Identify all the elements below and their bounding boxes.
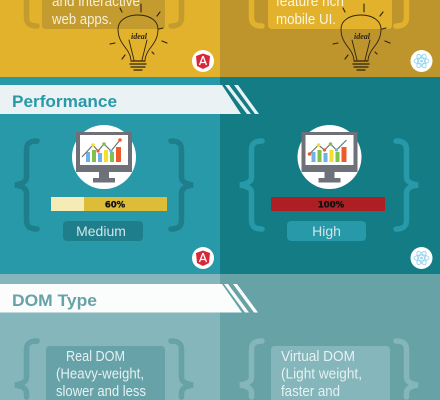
label: Medium: Medium	[76, 223, 126, 239]
label: Medium	[63, 221, 143, 241]
text block: Virtual DOM: Virtual DOM	[281, 348, 355, 365]
icon: React badge	[410, 247, 432, 269]
progress bar: 60%: 60%	[105, 200, 126, 210]
progress bar: 60%	[51, 197, 167, 211]
heading banner: Performance	[0, 85, 259, 114]
icon: monitor chart	[298, 125, 362, 189]
icon: React badge	[410, 50, 432, 72]
icon: monitor chart	[72, 125, 136, 189]
icon: light bulb: ideal	[354, 32, 371, 41]
brace: right	[171, 141, 193, 229]
brace: right	[396, 341, 418, 397]
text block: Real DOM: Real DOM	[66, 348, 125, 365]
progress bar: 100%	[271, 197, 385, 211]
brace: left	[252, 0, 262, 26]
icon: light bulb	[333, 4, 390, 70]
label: High: High	[312, 223, 341, 239]
heading banner: DOM Type	[0, 284, 258, 312]
text block: React use: mobile UI.	[276, 11, 336, 28]
icon: Angular badge	[192, 50, 214, 72]
icon: light bulb	[110, 4, 167, 70]
brace: left	[26, 0, 37, 26]
brace: right	[396, 0, 406, 26]
panel: ideal use, Angular	[0, 0, 220, 77]
text block: Virtual DOM: (Light weight,	[281, 366, 362, 382]
brace: left	[240, 341, 262, 397]
text block: Virtual DOM: faster and	[281, 383, 340, 400]
brace: left	[15, 141, 37, 229]
text block: Angular use: web apps.	[51, 11, 112, 28]
text block: Real DOM: slower and less	[56, 383, 146, 400]
text block: React use	[268, 0, 392, 29]
panel: DOM type, Angular	[0, 274, 220, 400]
brace: right	[171, 341, 193, 397]
brace: right	[171, 0, 182, 26]
label: High	[287, 221, 366, 241]
text block: Real DOM: (Heavy-weight,	[56, 366, 144, 382]
progress bar: 100%: 100%	[318, 200, 345, 210]
panel: DOM type, React	[220, 274, 440, 400]
brace: right	[396, 141, 418, 229]
text block: Virtual DOM	[271, 346, 390, 400]
icon: light bulb: ideal	[131, 32, 148, 41]
text block: Real DOM	[46, 346, 165, 400]
panel: performance, Angular	[0, 77, 220, 274]
panel: performance, React	[220, 77, 440, 274]
brace: left	[240, 141, 262, 229]
heading banner: DOM Type: DOM Type	[12, 291, 97, 310]
brace: left	[15, 341, 37, 397]
icon: Angular badge	[192, 247, 214, 269]
text block: Angular use	[42, 0, 165, 29]
heading banner: Performance: Performance	[12, 92, 117, 111]
panel: ideal use, React	[220, 0, 440, 77]
